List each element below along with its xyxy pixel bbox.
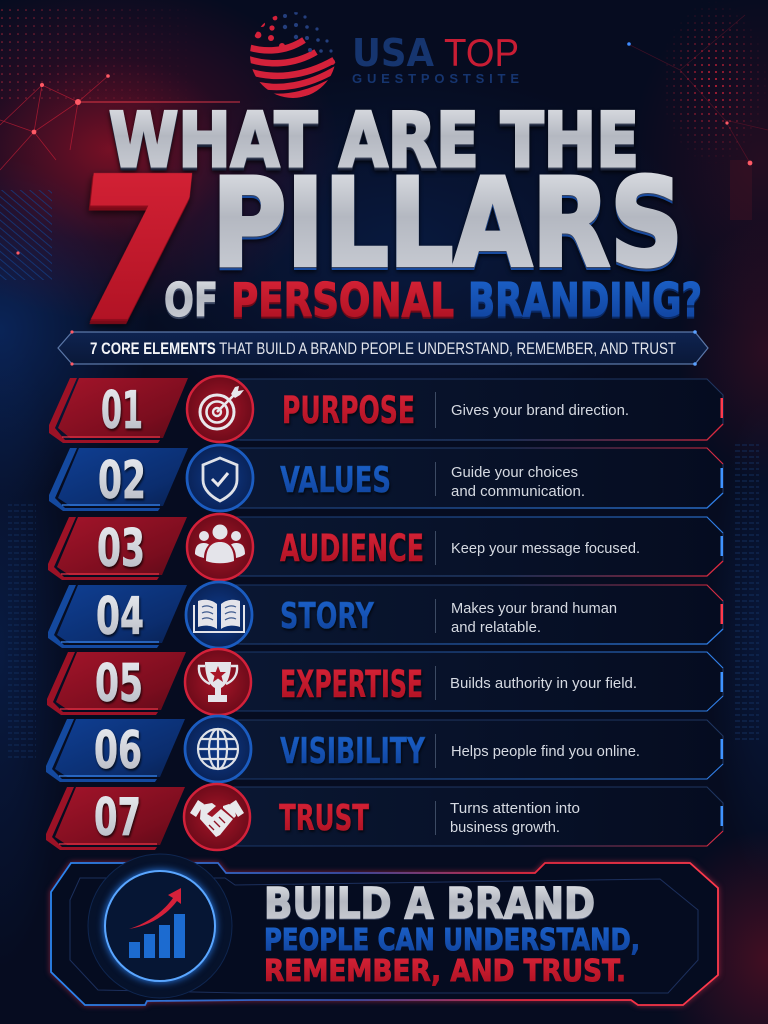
icon: shield with check [187,445,253,511]
heading word: branding: BRANDING? [468,273,702,327]
pillar row 01: purpose [49,376,723,443]
title [65,96,702,362]
label: STORY [280,596,375,637]
number badge: 03 [97,519,145,579]
subtitle banner [58,330,708,366]
number badge [48,517,187,580]
heading line: pillars: PILLARS [212,153,683,294]
number badge: 01 [101,381,143,441]
row bar [230,720,723,779]
row bar [230,517,723,576]
number badge [49,448,188,511]
wordmark USA: USA [352,31,435,75]
description: Guide your choices [451,465,578,481]
heading numeral 7: 7 [65,138,207,362]
label: EXPERTISE [280,663,423,706]
icon: open book [186,582,252,648]
description: Turns attention into [450,801,580,817]
number badge [49,378,188,443]
pillar row 07: trust [46,784,723,850]
pillar row 04: story [48,582,723,648]
heading word: personal: PERSONAL [231,273,454,327]
description: business growth. [450,820,560,836]
description: Helps people find you online. [451,744,640,760]
icon: growth chart in ring [88,854,232,998]
pillar row 03: audience [48,514,723,580]
number badge: 04 [96,587,144,647]
heading line: what are the: WHAT ARE THE [109,96,639,184]
description: Builds authority in your field. [450,676,637,692]
panel frame [51,863,718,1005]
pillar row 06: visibility [46,716,723,782]
row bar [230,787,723,846]
number badge [46,787,185,850]
description: Keep your message focused. [451,541,640,557]
pillar row 05: expertise [47,649,723,715]
heading word: of: OF [164,273,218,327]
wordmark TOP: TOP [444,32,519,75]
row bar [230,652,723,711]
cta line 1: BUILD A BRAND [264,879,595,929]
label: TRUST [279,798,369,839]
number badge: 05 [95,654,143,714]
description: Gives your brand direction. [451,403,629,419]
description: Makes your brand human [451,601,617,617]
icon: striped globe [250,12,336,98]
label: AUDIENCE [280,527,424,570]
description: and relatable. [451,620,541,636]
wordmark GUESTPOSTSITE: GUESTPOSTSITE [352,71,519,86]
icon: target with arrow [187,376,253,442]
row bar [230,585,723,644]
icon: handshake [184,784,250,850]
number badge: 07 [94,788,141,848]
row bar [230,379,723,440]
number badge [46,719,185,782]
label: VALUES [280,460,391,501]
call to action panel [51,854,718,1005]
logo [240,11,519,97]
number badge [48,585,187,648]
label: VISIBILITY [280,731,426,772]
background details [0,0,768,760]
number badge: 06 [94,721,142,781]
icon: globe [185,716,251,782]
icon: trophy with star [185,649,251,715]
cta line 2: PEOPLE CAN UNDERSTAND, [264,923,640,958]
cta line 3: REMEMBER, AND TRUST. [264,954,626,989]
number badge: 02 [98,451,146,511]
number badge [47,652,186,715]
icon: group of people [187,514,253,580]
description: and communication. [451,484,585,500]
label: PURPOSE [282,389,415,432]
row bar [230,448,723,508]
pillar row 02: values [49,445,723,511]
